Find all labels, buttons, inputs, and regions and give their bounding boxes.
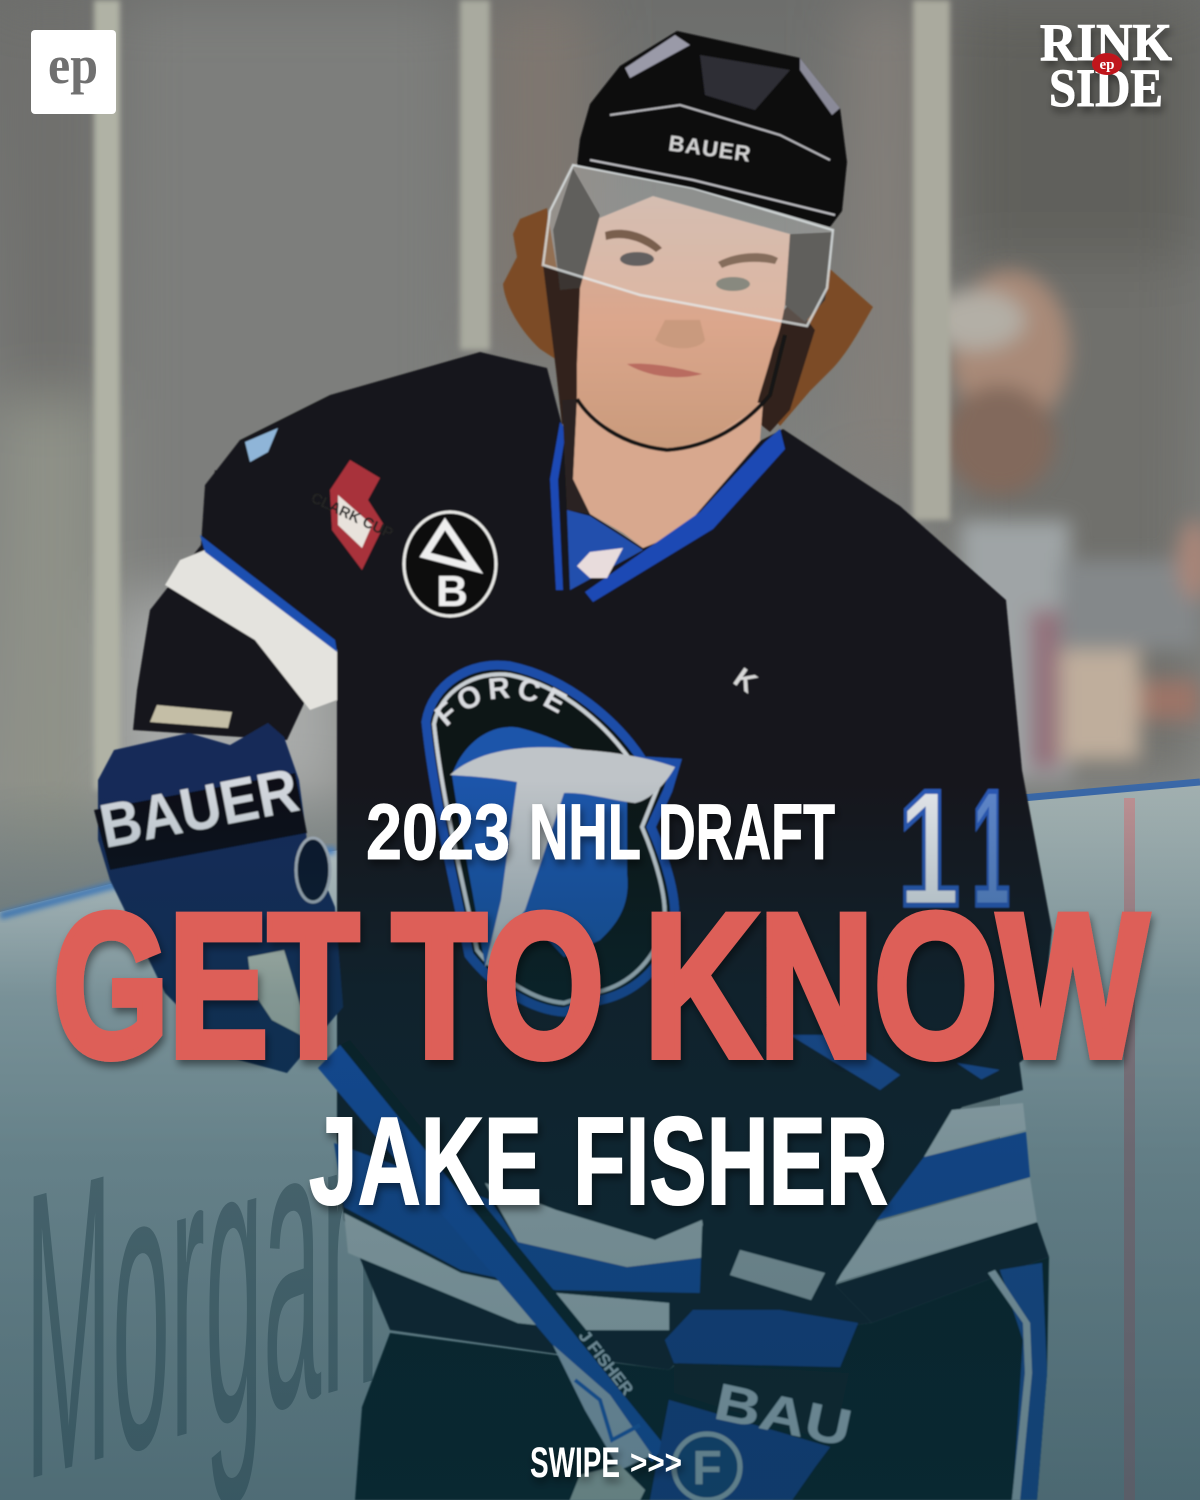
player jersey body [200, 352, 1052, 1370]
logo: ep: ep [48, 35, 98, 95]
player name: Jake Fisher [309, 1093, 888, 1231]
AB patch [404, 512, 496, 616]
logo: Rink Side: RINK [1040, 14, 1172, 72]
right glove: BAU [710, 1373, 857, 1458]
player pants [355, 1257, 1049, 1500]
maker logo: K [728, 662, 763, 699]
swipe prompt: >>> [630, 1444, 682, 1482]
subheading: 2023 NHL Draft: 2023 [366, 787, 510, 876]
Clark Cup patch: CLARK CUP [308, 490, 396, 542]
logo: Rink Side [1040, 14, 1172, 118]
AB patch: B [436, 567, 468, 616]
dark hair seen through visor [553, 168, 833, 322]
jersey number: 1 [898, 756, 960, 940]
player nose and mouth [655, 320, 705, 348]
player eyes [605, 230, 778, 291]
player name: Jake Fisher: JAKE [309, 1093, 542, 1231]
player photo [93, 30, 1053, 1500]
logo: ep [31, 30, 116, 114]
team crest: FORCE [433, 676, 568, 728]
subheading: 2023 NHL Draft [366, 787, 835, 876]
logo: Rink Side: ep [1100, 57, 1114, 73]
chin strap [577, 335, 785, 450]
player name: Jake Fisher: FISHER [573, 1093, 888, 1231]
white sleeve stripe [165, 550, 337, 710]
hockey stick: J FISHER [575, 1327, 637, 1399]
hockey stick [318, 1040, 672, 1470]
right sleeve stripes [790, 1035, 1049, 1323]
right glove: F [692, 1442, 722, 1495]
subheading: 2023 NHL Draft: DRAFT [658, 787, 835, 876]
title: Get to Know: GET [53, 872, 359, 1100]
neck shadow [562, 399, 590, 514]
right glove [650, 1250, 858, 1500]
subheading: 2023 NHL Draft: NHL [529, 787, 641, 876]
left glove [94, 705, 343, 1073]
left boards [0, 850, 600, 1500]
USA patch [577, 548, 623, 578]
player hair [503, 208, 873, 426]
left glove: BAUER [95, 756, 304, 862]
jersey hem stripes [334, 1143, 707, 1330]
player photo: 1 [972, 756, 1010, 940]
glove palm under swipe [570, 1465, 645, 1500]
glass stanchions [94, 0, 950, 790]
board cap lines [0, 850, 335, 916]
helmet [577, 31, 847, 227]
player left arm [133, 470, 337, 740]
hair shadow beside face [543, 265, 815, 432]
jersey collar [550, 422, 785, 602]
title: Get to Know: TO [392, 872, 604, 1100]
helmet: BAUER [667, 130, 753, 167]
team crest [420, 659, 683, 1018]
color overlay on lower photo [0, 780, 1200, 1500]
swipe prompt: SWIPE [530, 1439, 620, 1487]
player neck [573, 395, 763, 548]
player face [577, 196, 790, 450]
visor [543, 165, 833, 326]
right boards [1000, 782, 1200, 1500]
blurred spectators [925, 270, 1200, 780]
title: Get to Know [53, 872, 1148, 1100]
logo: Rink Side: SIDE [1049, 58, 1163, 118]
Clark Cup patch [308, 460, 396, 570]
right forearm [698, 1070, 948, 1345]
blurred glass tones [0, 0, 1200, 850]
